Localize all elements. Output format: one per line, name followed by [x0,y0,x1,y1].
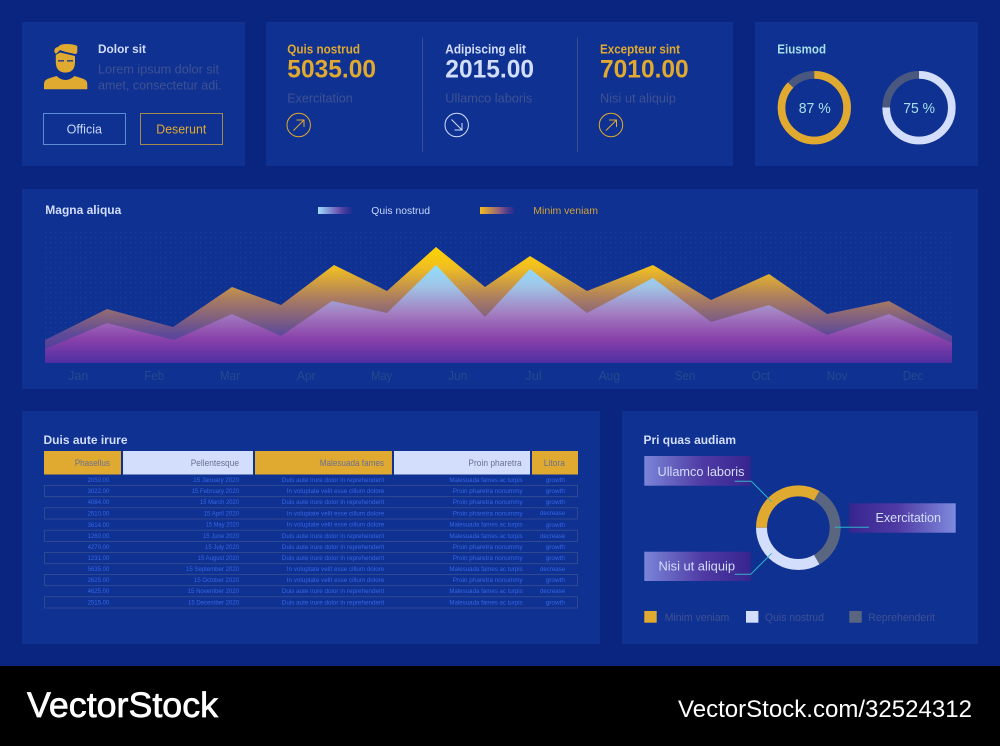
table row 7: Proin pharetra nonummy [453,544,523,551]
callout: Exercitation [835,503,956,533]
stat: Quis nostrud: 5035.00 [287,56,376,84]
table row 6: decrease [540,533,565,540]
axis: months [68,368,924,383]
table header: Litora [544,458,566,469]
table row 12: Duis aute irure dolor in reprehenderit [282,600,384,606]
table row 5: growth [546,522,565,529]
panel: stats [266,22,733,166]
table row 10: Proin pharetra nonummy [453,577,523,584]
area: Minim veniam series [45,247,952,363]
stat: Quis nostrud: Quis nostrud [287,42,360,56]
stat: Adipiscing elit: 2015.00 [445,56,534,84]
icon: arrow up right [599,113,623,137]
table row 1: Malesuada fames ac turpis [449,477,523,484]
table row 1 [88,477,565,484]
legend: Quis nostrud [318,205,430,217]
legend: Minim veniam [644,611,729,624]
legend: Quis nostrud: Quis nostrud [371,205,430,217]
axis: months: Mar [220,368,241,383]
icon: arrow down right [445,113,468,137]
table row 5 [88,522,565,529]
legend: Reprehenderit: Reprehenderit [868,612,935,624]
table row 11: 4625.00 [88,588,110,595]
divider [422,38,423,152]
ring: 87 percent: 87 % [799,100,831,117]
table row 11 [88,588,565,595]
table row 3: 15 March 2020 [200,499,239,506]
callout: Ullamco laboris: Ullamco laboris [658,464,745,479]
panel: donut [622,411,978,644]
ring: 75 percent [886,75,952,140]
table row 9: 5635.00 [88,566,110,573]
heading: Magna aliqua: Magna aliqua [45,203,122,217]
table row 2: In voluptate velit esse cillum dolore [287,488,385,495]
heading: Duis aute irure: Duis aute irure [44,433,128,447]
axis: months: Feb [144,368,164,383]
table row 1: Duis aute irure dolor in reprehenderit [282,477,384,484]
table row 10: 2625.00 [88,577,110,584]
table header [44,451,578,474]
stat: Quis nostrud: Exercitation [287,90,353,106]
table row 12: 15 December 2020 [188,600,239,606]
table row 10: 15 October 2020 [194,577,239,584]
table row 12 [44,597,578,608]
table header: Proin pharetra [468,458,522,469]
table row 5: 3614.00 [88,522,110,529]
table row 10 [44,574,578,586]
axis: months: Jul [525,368,542,383]
table row 9: In voluptate velit esse cillum dolore [287,566,385,573]
table row 9: decrease [540,566,565,573]
table row 4 [44,508,578,519]
chart: dotted grid [45,232,952,363]
table row 5: Malesuada fames ac turpis [449,522,523,528]
table row 1: 15 January 2020 [193,477,239,484]
table header: Pellentesque [191,458,239,469]
table row 3: Duis aute irure dolor in reprehenderit [282,499,384,506]
table header: Phasellus [75,458,110,469]
table row 1: 2050.00 [88,477,110,484]
legend: Minim veniam [480,205,598,217]
stat: Excepteur sint: Nisi ut aliquip [600,90,676,106]
axis: months: Apr [297,368,316,383]
table row 2: 15 February 2020 [192,488,239,495]
watermark bar [0,666,1000,746]
table row 2: Proin pharetra nonummy [453,488,523,495]
table row 12: growth [546,600,565,606]
axis: months: Nov [827,368,848,383]
table row 7: Duis aute irure dolor in reprehenderit [282,544,384,551]
table row 8: 15 August 2020 [198,555,239,562]
table row 11: 15 November 2020 [188,588,239,595]
table row 8: Proin pharetra nonummy [453,555,523,562]
panel: table [22,411,600,644]
axis: months: Jun [448,368,467,383]
table row 3: Proin pharetra nonummy [453,499,523,506]
table header: Malesuada fames [320,458,384,469]
divider [577,38,578,152]
table row 9 [88,566,565,573]
panel: area chart [22,189,978,389]
table row 6: 1260.00 [88,533,110,540]
table row 2: 3022.00 [88,488,110,495]
table row 6: 15 June 2020 [203,533,239,540]
table row 8: Duis aute irure dolor in reprehenderit [282,555,384,562]
icon: arrow up right [287,113,310,137]
text: VectorStock logo: VectorStock [27,686,219,725]
table row 2 [44,486,578,497]
table row 7 [88,544,565,551]
table row 1: growth [546,477,565,484]
axis: months: Jan [68,368,88,383]
legend: Minim veniam: Minim veniam [665,612,729,624]
table row 11: decrease [540,588,565,595]
table row 3 [88,499,565,506]
table row 3: growth [546,499,565,506]
ring: 75 percent: 75 % [903,100,935,117]
legend: Quis nostrud: Quis nostrud [765,612,824,624]
axis: months: Sen [675,368,695,383]
button: Deserunt: Deserunt [156,122,207,136]
table row 10: In voluptate velit esse cillum dolore [287,577,385,584]
stat: Adipiscing elit [445,42,534,137]
text: image URL: VectorStock.com/32524312 [678,696,972,723]
table row 7: growth [546,544,565,551]
legend: Minim veniam: Minim veniam [533,205,598,217]
callout: Nisi ut aliquip: Nisi ut aliquip [658,558,735,574]
table row 12: 2515.00 [88,600,110,606]
table row 7: 4270.00 [88,544,110,551]
table row 5: In voluptate velit esse cillum dolore [287,522,385,528]
table row 7: 15 July 2020 [205,544,239,551]
table row 4: Proin pharetra nonummy [453,510,523,518]
area: Quis nostrud series [45,265,952,363]
donut chart [762,491,835,565]
callout: Nisi ut aliquip [644,552,772,581]
table row 11: Malesuada fames ac turpis [449,588,523,595]
button: Officia [44,114,126,144]
stat: Excepteur sint: 7010.00 [600,56,689,84]
button: Deserunt [140,114,222,144]
stat: Excepteur sint: Excepteur sint [600,42,681,56]
heading: Pri quas audiam: Pri quas audiam [644,433,736,447]
panel: profile [22,22,245,166]
icon: person [44,44,87,89]
table row 4: 2510.00 [88,510,110,518]
axis: months: May [371,368,393,383]
table row 10: growth [546,577,565,584]
text: lorem line 2: amet, consectetur adi. [98,78,222,92]
table row 4: In voluptate velit esse cillum dolore [287,510,385,518]
table row 4: 15 April 2020 [204,510,239,518]
table row 11: Duis aute irure dolor in reprehenderit [282,588,384,595]
stat: Adipiscing elit: Adipiscing elit [445,42,527,56]
heading: Dolor sit: Dolor sit [98,42,146,56]
panel: Eiusmod rings [755,22,978,166]
ring: 87 percent [782,75,847,140]
table row 9: 15 September 2020 [186,566,239,573]
text: lorem line 1: Lorem ipsum dolor sit [98,62,219,76]
table row 3: 4084.00 [88,499,110,506]
table row 5: 15 May 2020 [206,522,239,528]
callout: Ullamco laboris [644,456,772,502]
table row 8: 1231.00 [88,555,110,562]
table row 12: Malesuada fames ac turpis [449,600,523,606]
legend: Quis nostrud [746,611,824,624]
stat: Adipiscing elit: Ullamco laboris [445,90,533,106]
table row 8 [44,552,578,564]
stat: Excepteur sint [599,42,689,137]
axis: months: Oct [752,368,770,383]
button: Officia: Officia [67,122,102,136]
table row 4: decrease [540,510,565,517]
table row 6 [44,530,578,541]
table row 6: Malesuada fames ac turpis [449,533,523,540]
axis: months: Dec [903,368,924,383]
stat: Quis nostrud [287,42,376,137]
table row 2: growth [546,488,565,495]
callout: Exercitation: Exercitation [876,510,941,525]
table row 6: Duis aute irure dolor in reprehenderit [282,533,384,540]
table row 9: Malesuada fames ac turpis [449,566,523,573]
axis: months: Aug [599,368,620,383]
table row 8: growth [546,555,565,562]
heading: Eiusmod: Eiusmod [777,42,826,56]
